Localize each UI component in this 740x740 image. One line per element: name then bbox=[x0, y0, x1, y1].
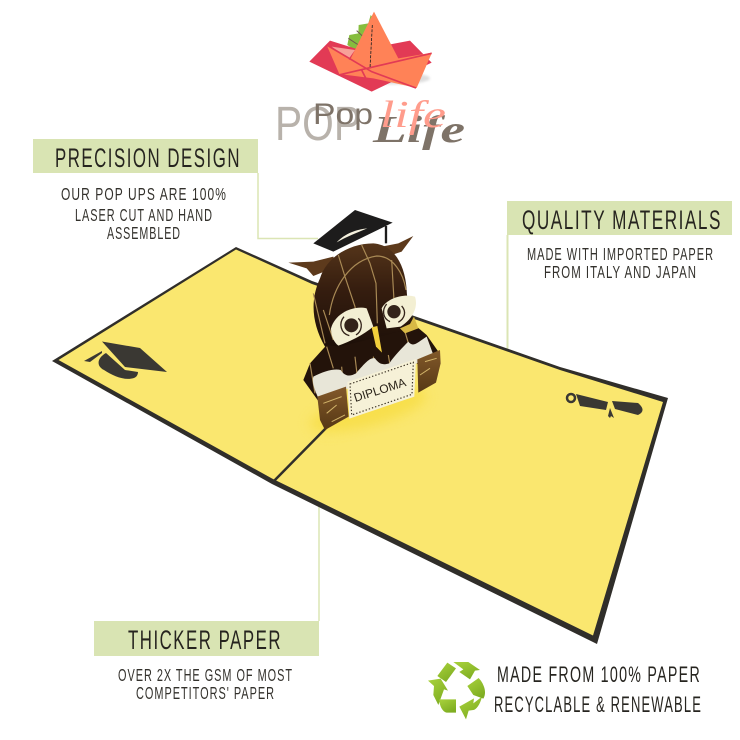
icon: recycle bbox=[428, 662, 485, 719]
diploma banner: DIPLOMA bbox=[352, 375, 408, 405]
owl eye: left bbox=[331, 308, 373, 346]
heading bar bbox=[507, 201, 732, 235]
logo icon: origami boat bbox=[309, 12, 432, 92]
owl pop-up bbox=[288, 210, 441, 430]
heading bar bbox=[33, 139, 258, 173]
owl lower body bbox=[303, 327, 438, 403]
owl eye: right bbox=[382, 296, 416, 328]
heading: THICKER PAPER bbox=[128, 625, 282, 655]
logo wordmark: POP thin: POP bbox=[275, 98, 361, 151]
diploma banner bbox=[347, 359, 416, 419]
panel: recyclable bbox=[428, 662, 702, 719]
icon: diploma scroll bbox=[567, 394, 642, 418]
logo wordmark: Life grey: Life bbox=[372, 109, 465, 151]
description bbox=[118, 665, 293, 703]
logo wordmark: life coral: life bbox=[380, 94, 446, 136]
icon: graduation cap bbox=[84, 342, 167, 379]
description bbox=[61, 184, 227, 243]
owl wing marks bbox=[323, 358, 437, 422]
card yellow paper bbox=[58, 250, 663, 636]
owl scroll band bbox=[313, 337, 434, 398]
owl beak bbox=[372, 326, 382, 353]
owl wing: right bbox=[417, 350, 441, 393]
connector: thicker paper bbox=[318, 505, 320, 621]
panel: precision design bbox=[33, 139, 258, 243]
owl strips bbox=[310, 245, 413, 393]
logo wordmark: Pop: Pop bbox=[313, 98, 373, 131]
connector: precision design bbox=[258, 173, 318, 238]
owl wing: left bbox=[317, 387, 349, 430]
connector: quality materials bbox=[506, 235, 508, 350]
description: LASER CUT AND HAND bbox=[75, 205, 213, 225]
heading bar bbox=[94, 621, 319, 656]
recycle text bbox=[494, 662, 702, 717]
description: OUR POP UPS ARE 100% bbox=[61, 184, 227, 204]
description: OVER 2X THE GSM OF MOST bbox=[118, 665, 293, 685]
logo: Pop Life bbox=[275, 12, 465, 151]
card fold line bbox=[272, 424, 330, 483]
owl yellow foot bbox=[400, 317, 418, 333]
description: COMPETITORS' PAPER bbox=[136, 683, 275, 703]
owl tufts bbox=[288, 236, 413, 276]
description bbox=[527, 244, 714, 282]
panel: thicker paper bbox=[94, 621, 319, 703]
heading: PRECISION DESIGN bbox=[55, 143, 241, 173]
card shadow below owl bbox=[306, 379, 430, 441]
owl head bbox=[314, 243, 417, 348]
description: ASSEMBLED bbox=[107, 223, 181, 243]
card border bbox=[52, 247, 668, 644]
pop-up card bbox=[52, 210, 668, 644]
panel: quality materials bbox=[507, 201, 732, 282]
owl cap bbox=[313, 210, 393, 252]
